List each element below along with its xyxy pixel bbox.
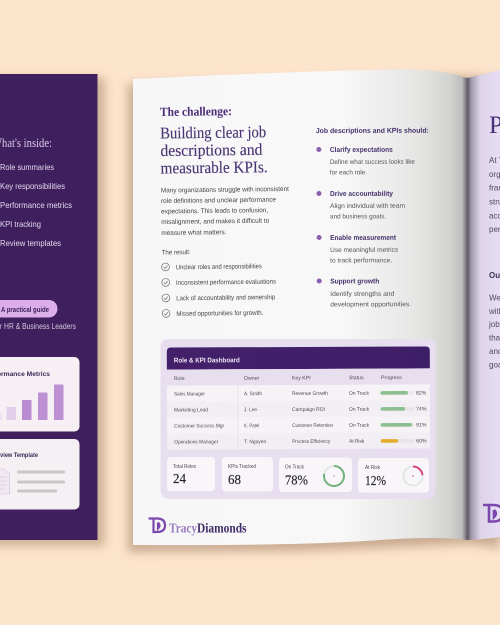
stat card: on track with ring bbox=[279, 458, 352, 492]
right page paragraph 1 bbox=[489, 156, 500, 234]
right page paragraph 2: tha bbox=[489, 334, 500, 342]
item: drive accountability: Drive accountability bbox=[330, 191, 393, 198]
stat card: on track with ring: On Track bbox=[285, 464, 304, 470]
item: clarify expectations: Clarify expectations bbox=[330, 147, 393, 154]
cover list: Key responsibilities bbox=[0, 182, 65, 191]
logo: Tracy Diamonds bbox=[148, 518, 246, 536]
stat card: KPIs tracked bbox=[222, 457, 273, 492]
row: marketing lead: Campaign ROI bbox=[292, 407, 325, 413]
row: marketing lead: J. Lee bbox=[244, 407, 257, 413]
row: sales manager: 82% bbox=[416, 390, 427, 396]
item: support growth: development opportunities. bbox=[330, 301, 411, 308]
row: marketing lead: Marketing Lead bbox=[174, 407, 208, 414]
row: operations manager: 60% bbox=[416, 438, 427, 444]
main heading bbox=[160, 122, 268, 178]
item: drive accountability: Align individual with team bbox=[330, 203, 406, 210]
table header bar bbox=[167, 346, 430, 370]
right page paragraph 2: job bbox=[488, 320, 500, 329]
panel: dashboard bbox=[160, 339, 436, 499]
result checklist bbox=[162, 262, 277, 318]
stat card: KPIs tracked: 68 bbox=[228, 472, 241, 487]
row: sales manager: Revenue Growth bbox=[292, 391, 328, 397]
column headers bbox=[167, 368, 430, 386]
page shadow bbox=[128, 76, 500, 552]
item: enable measurement bbox=[317, 235, 399, 264]
intro paragraph: role definitions and unclear performance bbox=[161, 197, 276, 205]
pill: a practical guide bbox=[0, 300, 58, 318]
left column: challenge text bbox=[160, 103, 291, 318]
dashboard table bbox=[167, 346, 430, 450]
cover list: KPI tracking bbox=[0, 220, 41, 229]
logo: Tracy Diamonds: Tracy bbox=[169, 520, 197, 536]
stat card: total roles: Total Roles bbox=[173, 464, 196, 470]
item: support growth: Identify strengths and bbox=[330, 291, 395, 298]
right page subheading: Ou bbox=[489, 271, 500, 280]
item: support growth: Support growth bbox=[330, 278, 379, 285]
result checklist: Unclear roles and responsibilities bbox=[176, 263, 262, 271]
result label: The result: bbox=[162, 249, 191, 256]
intro paragraph bbox=[161, 186, 290, 237]
column headers: Owner bbox=[244, 376, 259, 382]
cover list: Review templates bbox=[0, 239, 61, 248]
stat card: total roles: 24 bbox=[173, 471, 186, 486]
right page bbox=[467, 70, 500, 540]
cover list: Role summaries bbox=[0, 163, 54, 172]
item: enable measurement: to track performance. bbox=[330, 257, 392, 264]
item: drive accountability: and business goals. bbox=[330, 213, 386, 220]
row: sales manager bbox=[174, 390, 427, 398]
row: sales manager: A. Smith bbox=[244, 391, 262, 397]
stat card: on track with ring: 78% bbox=[285, 472, 308, 488]
column headers: Progress bbox=[381, 375, 402, 381]
row: sales manager: Sales Manager bbox=[174, 391, 205, 398]
left cover: dark brochure panel bbox=[0, 74, 105, 546]
intro paragraph: misalignment, and makes it difficult to bbox=[161, 218, 270, 226]
stat card: at risk with ring bbox=[358, 458, 429, 492]
right page paragraph 2 bbox=[488, 294, 500, 370]
item: drive accountability bbox=[316, 191, 406, 220]
stat card: total roles bbox=[167, 457, 215, 491]
row: operations manager: T. Nguyen bbox=[244, 439, 266, 445]
item: enable measurement: Enable measurement bbox=[330, 235, 397, 242]
card: review template bbox=[0, 439, 80, 510]
row: marketing lead: 74% bbox=[416, 406, 427, 412]
row: sales manager: On Track bbox=[349, 391, 369, 397]
cover list: Performance metrics bbox=[0, 201, 72, 210]
dashboard title: Role & KPI Dashboard bbox=[174, 357, 240, 365]
icon: TD monogram bbox=[148, 518, 165, 532]
row: operations manager: At Risk bbox=[349, 439, 365, 445]
right column: job descriptions and KPIs should bbox=[316, 128, 429, 308]
row: operations manager bbox=[174, 438, 427, 446]
centre page bbox=[133, 69, 467, 545]
eyebrow heading: The challenge: bbox=[160, 104, 232, 119]
row: customer success: K. Patel bbox=[244, 423, 259, 429]
stat card: at risk with ring: At Risk bbox=[365, 465, 380, 471]
pill: a practical guide: A practical guide bbox=[1, 307, 49, 314]
result checklist: Inconsistent performance evaluations bbox=[176, 279, 277, 287]
item: clarify expectations: Define what success looks like bbox=[330, 159, 415, 166]
column headers: Role bbox=[174, 376, 185, 382]
row: customer success bbox=[174, 422, 427, 430]
icon: right page logo bbox=[483, 505, 500, 522]
row: customer success: Customer Success Mgr bbox=[174, 423, 224, 430]
row: operations manager: Process Efficiency bbox=[292, 439, 331, 445]
row: customer success: 91% bbox=[416, 422, 427, 428]
item: enable measurement: Use meaningful metrics bbox=[330, 247, 399, 254]
intro paragraph: expectations. This leads to confusion, bbox=[161, 207, 268, 215]
row: marketing lead bbox=[174, 406, 427, 414]
column headers: Status bbox=[349, 375, 364, 381]
item: clarify expectations bbox=[316, 147, 415, 176]
row: customer success: On Track bbox=[349, 423, 370, 429]
stat card: KPIs tracked: KPIs Tracked bbox=[228, 464, 256, 470]
column headers: Key KPI bbox=[292, 375, 311, 382]
item: support growth bbox=[317, 278, 411, 308]
intro paragraph: Many organizations struggle with inconsistent bbox=[161, 186, 289, 195]
main heading: descriptions and bbox=[160, 140, 263, 160]
row: customer success: Customer Retention bbox=[292, 423, 333, 429]
row: marketing lead: On Track bbox=[349, 407, 369, 413]
intro paragraph: measure what matters. bbox=[161, 229, 227, 237]
column heading: Job descriptions and KPIs should: bbox=[316, 128, 429, 135]
row: operations manager: Operations Manager bbox=[174, 439, 218, 446]
card: performance metrics bbox=[0, 357, 80, 432]
main heading: measurable KPIs. bbox=[160, 157, 268, 178]
logo: Tracy Diamonds: Diamonds bbox=[197, 520, 246, 536]
cover list bbox=[0, 163, 72, 248]
stat card: at risk with ring: 12% bbox=[365, 473, 386, 488]
result checklist: Lack of accountability and ownership bbox=[176, 294, 276, 302]
main heading: Building clear job bbox=[160, 122, 266, 143]
item: clarify expectations: for each role. bbox=[330, 169, 367, 176]
result checklist: Missed opportunities for growth. bbox=[176, 310, 264, 318]
